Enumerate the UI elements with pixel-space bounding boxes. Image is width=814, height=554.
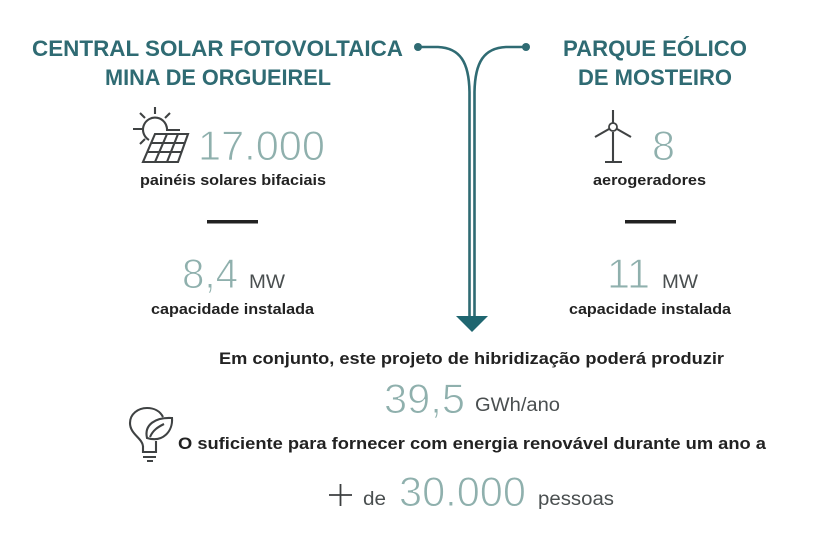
- arrow: two sources merging downward: [414, 43, 530, 332]
- heading: solar plant: MINA DE ORGUEIREL: [105, 65, 331, 90]
- divider right: [625, 220, 676, 224]
- stat: turbines count: 8: [652, 122, 675, 169]
- heading: wind farm: DE MOSTEIRO: [578, 65, 732, 90]
- text: combined production intro: Em conjunto, este projeto de hibridização poderá produzir: [219, 349, 724, 368]
- stat: solar panels count: 17.000: [198, 122, 325, 169]
- heading: solar plant: CENTRAL SOLAR FOTOVOLTAICA: [32, 36, 403, 61]
- stat: solar installed capacity: MW: [249, 272, 285, 293]
- stat: people served: [329, 468, 614, 515]
- icon: sun and solar panel: [133, 107, 188, 162]
- stat: people served: de: [363, 489, 386, 510]
- stat: solar panels count: [140, 122, 326, 189]
- stat: turbines count: [593, 122, 706, 189]
- stat: turbines count: aerogeradores: [593, 173, 706, 189]
- icon: wind turbine: [595, 110, 631, 162]
- stat: people served: pessoas: [538, 489, 614, 510]
- stat: solar panels count: painéis solares bifaciais: [140, 173, 326, 189]
- heading: solar plant: [32, 36, 403, 90]
- stat: annual production: 39,5: [384, 375, 465, 422]
- stat: wind installed capacity: [569, 250, 732, 318]
- icon: light bulb with leaf: [130, 408, 172, 461]
- stat: people served: 30.000: [399, 468, 526, 515]
- stat: annual production: [384, 375, 560, 422]
- divider left: [207, 220, 258, 224]
- stat: wind installed capacity: capacidade instalada: [569, 301, 732, 318]
- heading: wind farm: PARQUE EÓLICO: [563, 36, 747, 61]
- stat: wind installed capacity: MW: [662, 272, 698, 293]
- stat: solar installed capacity: [151, 250, 315, 318]
- stat: solar installed capacity: capacidade instalada: [151, 301, 315, 318]
- stat: wind installed capacity: 11: [607, 250, 650, 297]
- stat: solar installed capacity: 8,4: [182, 250, 238, 297]
- stat: annual production: GWh/ano: [475, 395, 560, 416]
- text: renewable energy statement: O suficiente para fornecer com energia renovável durante um ano a: [178, 434, 767, 453]
- heading: wind farm: [563, 36, 747, 90]
